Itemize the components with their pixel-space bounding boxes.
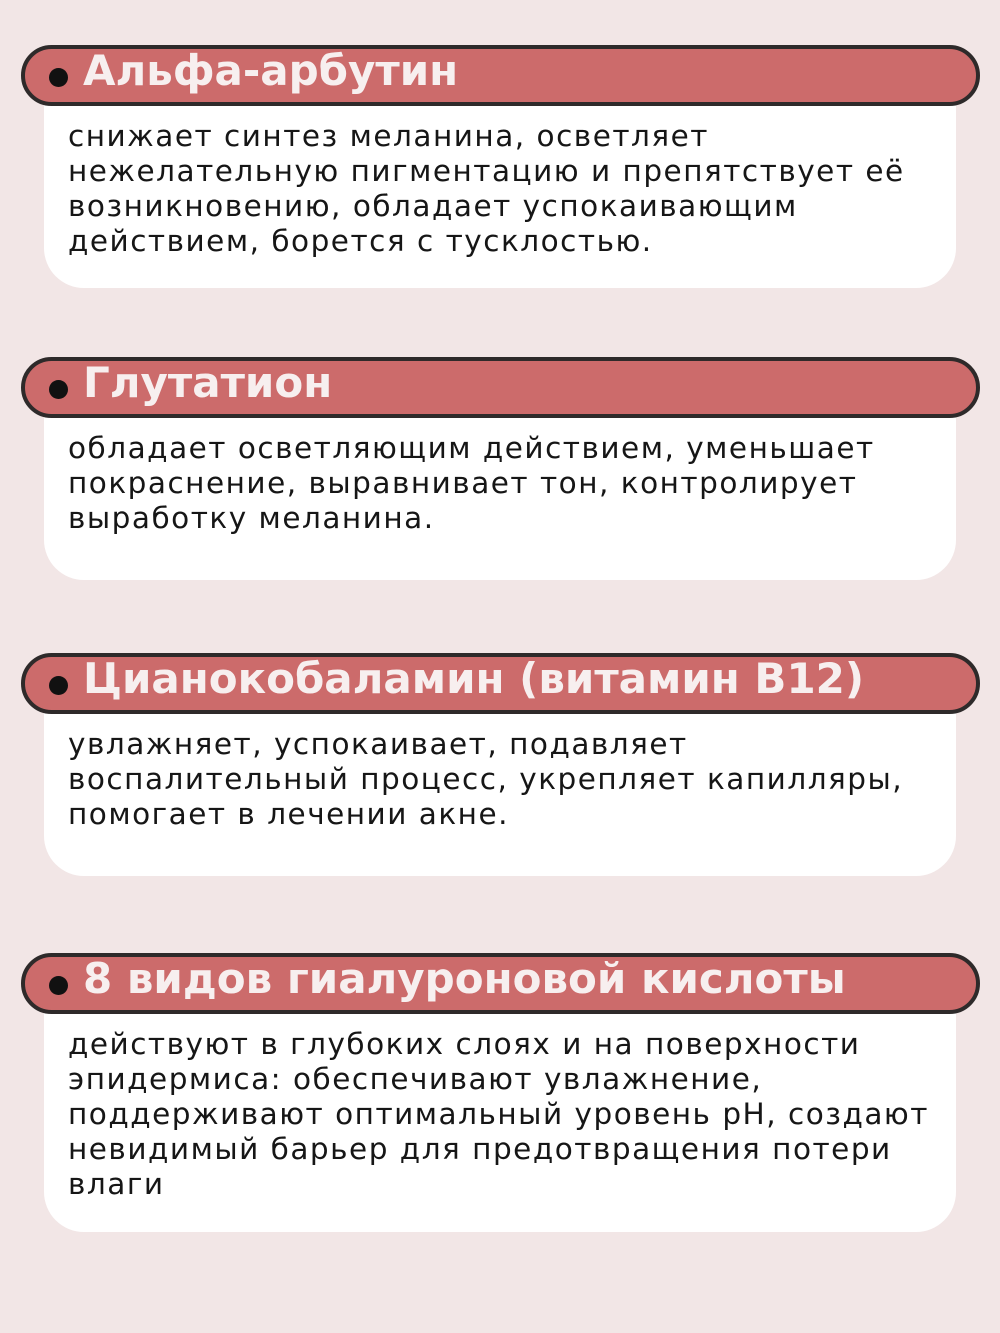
header: glutathione: Глутатион: [83, 358, 332, 407]
card: hyaluronic text: эпидермиса: обеспечивают увлажнение,: [68, 1062, 762, 1096]
card: hyaluronic text: [44, 1006, 956, 1232]
header: glutathione: [21, 357, 980, 418]
header: B12: Цианокобаламин (витамин B12): [83, 654, 864, 703]
card: hyaluronic text: поддерживают оптимальный уровень pH, создают: [68, 1097, 929, 1131]
card: alpha-arbutin text: действием, борется с тусклостью.: [68, 224, 653, 258]
card: hyaluronic text: невидимый барьер для предотвращения потери: [68, 1132, 892, 1166]
card: B12 text: помогает в лечении акне.: [68, 797, 509, 831]
header: B12: [21, 653, 980, 714]
header: hyaluronic: [21, 953, 980, 1014]
card: B12 text: [44, 706, 956, 876]
card: alpha-arbutin text: [44, 98, 956, 288]
header: hyaluronic: 8 видов гиалуроновой кислоты: [83, 954, 846, 1003]
card: glutathione text: обладает осветляющим действием, уменьшает: [68, 431, 875, 465]
header: alpha-arbutin: Альфа-арбутин: [83, 46, 458, 95]
card: alpha-arbutin text: нежелательную пигментацию и препятствует её: [68, 154, 905, 188]
card: alpha-arbutin text: снижает синтез меланина, осветляет: [68, 119, 709, 153]
card: hyaluronic text: действуют в глубоких слоях и на поверхности: [68, 1027, 860, 1061]
header: alpha-arbutin: [21, 45, 980, 106]
card: B12 text: увлажняет, успокаивает, подавляет: [68, 727, 688, 761]
card: glutathione text: покраснение, выравнивает тон, контролирует: [68, 466, 857, 500]
card: glutathione text: [44, 410, 956, 580]
card: hyaluronic text: влаги: [68, 1167, 164, 1201]
card: glutathione text: выработку меланина.: [68, 501, 435, 535]
card: B12 text: воспалительный процесс, укрепляет капилляры,: [68, 762, 903, 796]
card: alpha-arbutin text: возникновению, обладает успокаивающим: [68, 189, 798, 223]
